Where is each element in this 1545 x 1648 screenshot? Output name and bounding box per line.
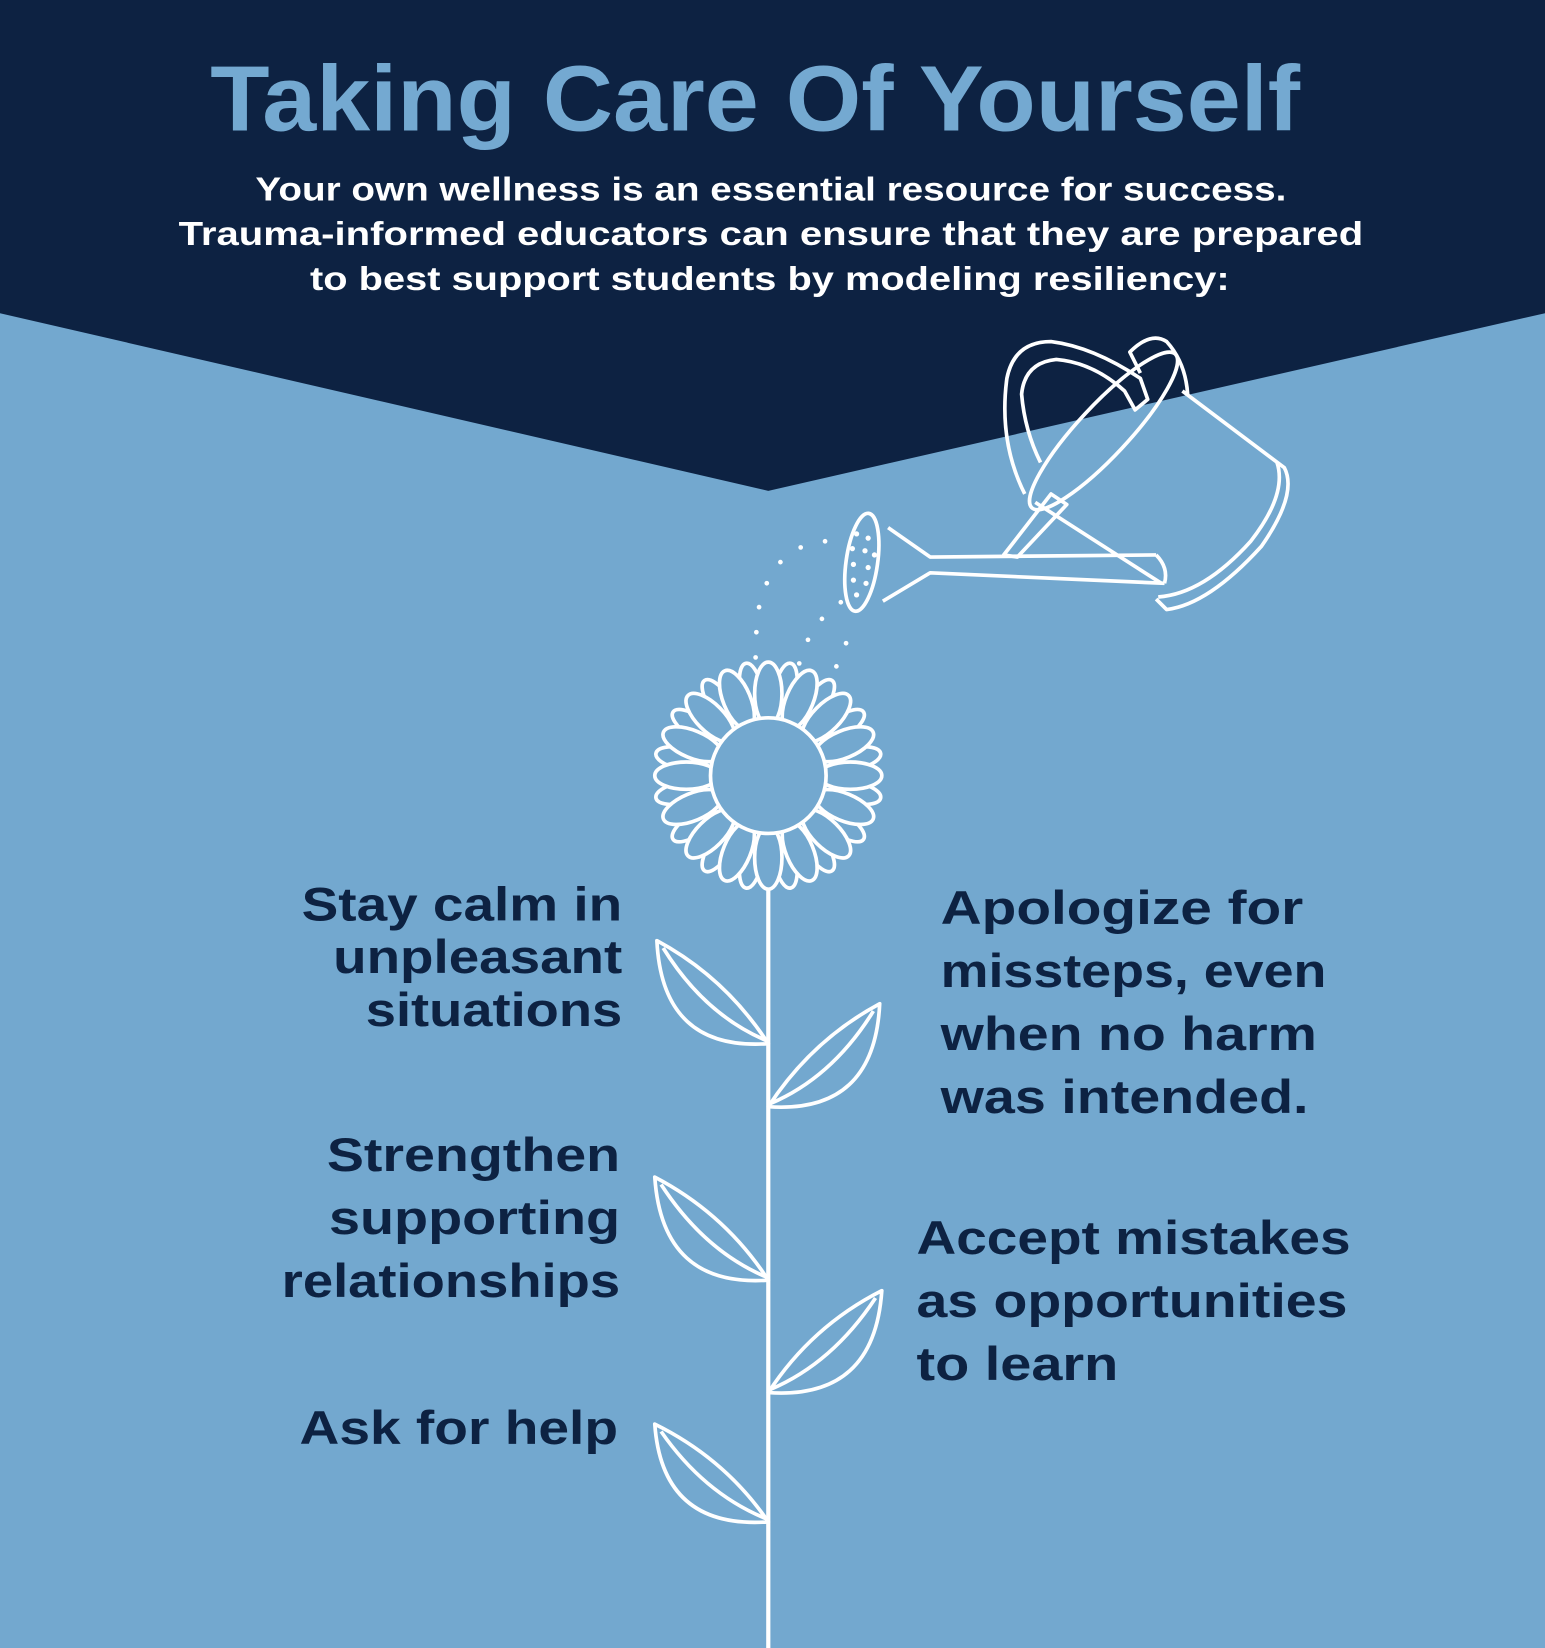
text: right items: [916, 882, 1351, 1391]
header banner: [0, 0, 1545, 491]
text: left items: Ask for help: [300, 1402, 618, 1455]
water drops: [753, 541, 846, 790]
text: left items: Strengthen: [327, 1129, 620, 1182]
subtitle: Your own wellness is an essential resource for success.: [255, 172, 1286, 209]
text: right items: Accept mistakes: [916, 1212, 1351, 1265]
subtitle: to best support students by modeling resiliency:: [310, 261, 1230, 298]
icon: sunflower: [654, 661, 883, 890]
icon: watering can: [839, 337, 1288, 613]
leaves: [655, 941, 882, 1522]
text: left items: [282, 879, 622, 1455]
text: right items: when no harm: [939, 1008, 1317, 1061]
text: left items: supporting: [329, 1192, 620, 1245]
text: left items: unpleasant: [333, 931, 622, 984]
text: right items: to learn: [916, 1338, 1118, 1391]
text: right items: was intended.: [939, 1071, 1309, 1124]
title: Taking Care Of Yourself: [210, 46, 1300, 150]
subtitle: [179, 172, 1363, 298]
text: right items: Apologize for: [941, 882, 1303, 935]
text: left items: relationships: [282, 1255, 620, 1308]
text: right items: as opportunities: [916, 1275, 1347, 1328]
text: left items: Stay calm in: [302, 879, 622, 932]
stem: [766, 888, 770, 1648]
icon: rose holes: [850, 531, 877, 598]
text: right items: missteps, even: [941, 945, 1326, 998]
subtitle: Trauma-informed educators can ensure that they are prepared: [179, 216, 1363, 253]
text: left items: situations: [366, 984, 622, 1037]
